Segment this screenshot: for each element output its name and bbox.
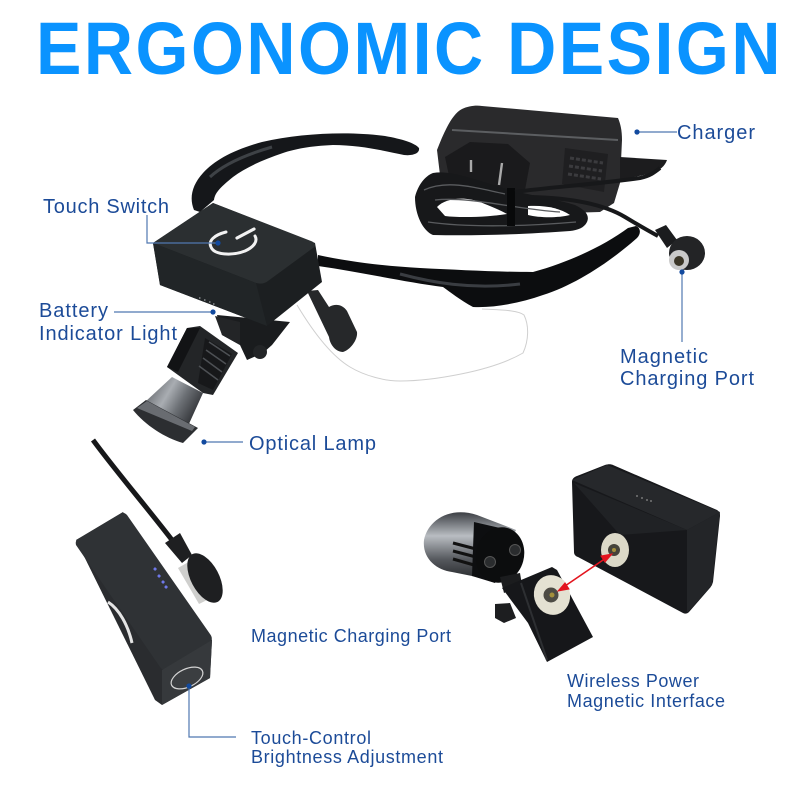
leader: charger (634, 129, 677, 135)
label: charger: Charger (677, 122, 755, 144)
label: battery indicator light: Indicator Light (39, 323, 177, 345)
leader: battery light (114, 309, 216, 315)
headband arc (192, 133, 419, 212)
mount (217, 315, 290, 360)
label: wireless power: Wireless Power (567, 671, 699, 691)
lamp (133, 316, 240, 443)
charger body (437, 106, 622, 215)
red double arrow (558, 554, 612, 591)
product: charger (415, 106, 705, 270)
leader: touch switch (147, 215, 221, 246)
product: battery with cable (76, 440, 230, 705)
indicator dots (155, 569, 166, 587)
strain relief (620, 157, 667, 180)
switch module (153, 203, 322, 326)
leader: magnetic charging port (679, 269, 685, 342)
side arm (318, 226, 640, 307)
label: touch-control brightness: Touch-Control (251, 728, 371, 748)
touch pad (168, 663, 206, 693)
label: battery indicator light: Battery (39, 300, 108, 322)
leader: touch control (186, 683, 236, 737)
bracket (500, 573, 522, 593)
lens (297, 305, 528, 381)
nose pad (307, 290, 357, 352)
title: ERGONOMIC DESIGN (36, 8, 783, 91)
plug face (445, 142, 530, 205)
leader: optical lamp (201, 439, 243, 445)
cable (93, 440, 172, 540)
battery dots (199, 298, 214, 304)
label: touch switch: Touch Switch (43, 196, 169, 218)
power icon (210, 229, 256, 254)
battery body (76, 512, 212, 705)
magnetic plug (655, 225, 705, 270)
label: touch-control brightness: Brightness Adjustment (251, 747, 443, 767)
side power icon (108, 602, 132, 643)
cable coil (415, 168, 660, 236)
label: magnetic charging port: Charging Port (620, 368, 754, 390)
magnet connector (165, 533, 192, 563)
label: battery magnetic charging port: Magnetic Charging Port (251, 626, 451, 646)
product: headset glasses (133, 133, 640, 443)
label: optical lamp: Optical Lamp (249, 433, 376, 455)
power bank (572, 464, 720, 614)
label: wireless power: Magnetic Interface (567, 691, 725, 711)
lamp barrel (424, 512, 516, 580)
rating label (562, 148, 608, 192)
label: magnetic charging port: Magnetic (620, 346, 708, 368)
product: lamp and magnetic battery (424, 464, 720, 662)
